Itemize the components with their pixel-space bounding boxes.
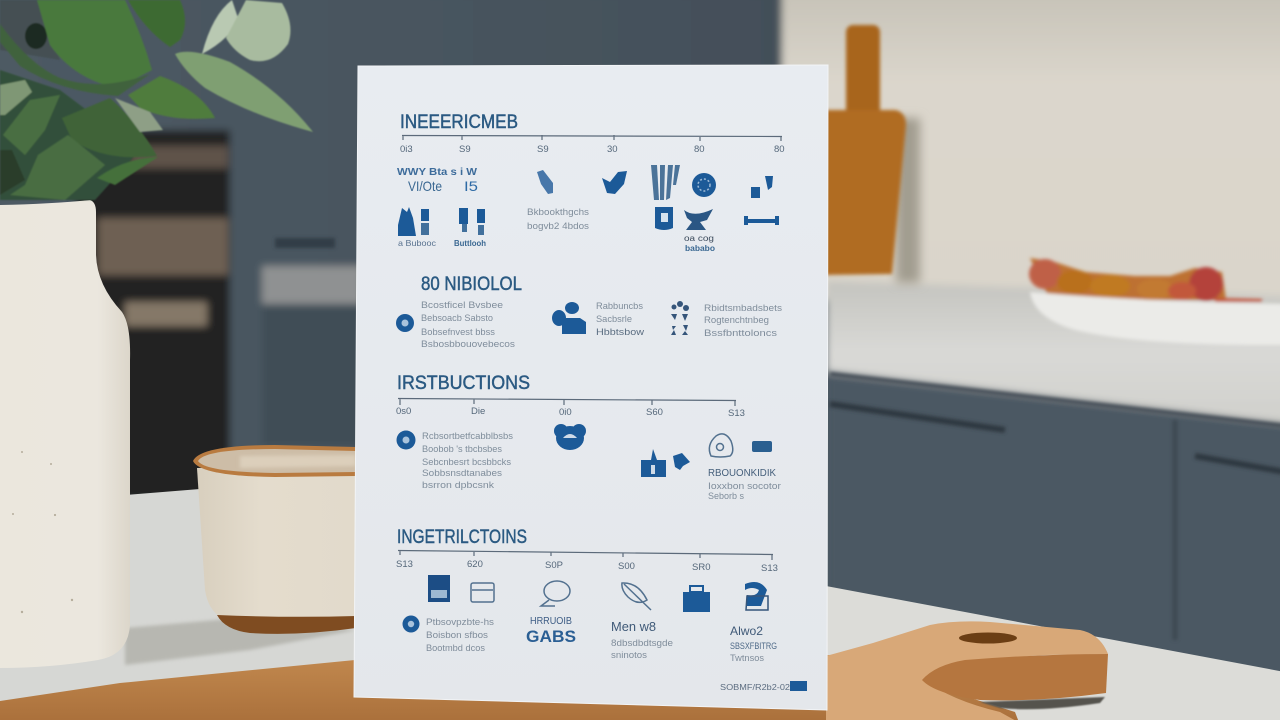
- section 3 timeline: 0s0: [396, 406, 411, 417]
- instruction text: bsrron dpbcsnk: [422, 480, 494, 491]
- instruction text: Sobbsnsdtanabes: [422, 468, 502, 479]
- figure captions: a Bubooc: [398, 238, 437, 248]
- section 3 timeline: 0i0: [559, 407, 572, 418]
- caption: middle: sninotos: [611, 650, 647, 661]
- text column 1: Bebsoacb Sabsto: [421, 313, 493, 324]
- section 1: [397, 112, 785, 253]
- section 4: [396, 527, 807, 692]
- ceramic cup: [193, 445, 356, 634]
- text column 2: Hbbtsbow: [596, 327, 644, 338]
- caption: Ioxxbon socotor: [708, 481, 781, 492]
- section 1 timeline: 0i3: [400, 144, 413, 155]
- section 3 timeline: [396, 398, 745, 419]
- wooden cutting board on the wall: [825, 25, 906, 275]
- caption: bold blue: HRRUOIB: [530, 615, 572, 627]
- section 4 timeline: S13: [396, 559, 413, 570]
- instruction text: Boisbon sfbos: [426, 630, 488, 641]
- caption: middle: Men w8: [611, 619, 656, 634]
- text column 3: [704, 303, 782, 339]
- caption: middle: 8dbsdbdtsgde: [611, 638, 673, 649]
- anvil caption: oa cog: [684, 234, 714, 243]
- section 1 timeline: 30: [607, 144, 618, 155]
- marble table left: [0, 489, 360, 710]
- icon: rounded animal: [554, 424, 586, 450]
- marble table right: [826, 586, 1280, 720]
- section 4 timeline: [396, 550, 778, 574]
- caption: middle: [611, 619, 673, 661]
- instruction text: Bootmbd dcos: [426, 643, 485, 654]
- instruction text: [426, 617, 494, 654]
- icon: cluster: [552, 302, 586, 334]
- ceramic vase: [0, 200, 130, 668]
- text column 2: [596, 301, 644, 338]
- anvil caption: bababo: [685, 244, 715, 253]
- section 1 label: [397, 167, 478, 194]
- instruction text: Boobob 's tbcbsbes: [422, 444, 502, 455]
- text column 1: [421, 300, 515, 350]
- badge icon: [396, 430, 416, 450]
- footer note: SOBMF/R2b2-02: [720, 683, 791, 692]
- icon: figures left: [398, 207, 485, 236]
- text column 3: Rbidtsmbadsbets: [704, 303, 782, 314]
- section 1 label: I5: [464, 178, 478, 194]
- badge icon: [402, 616, 420, 632]
- icon: outlined panel: [471, 583, 494, 602]
- caption: right: [730, 624, 777, 664]
- icon: outlined leaf: [622, 583, 651, 610]
- section 1 label: VI/Ote: [408, 178, 442, 194]
- cabinet door details: [275, 243, 1280, 640]
- icon: outlined brain: [541, 581, 570, 606]
- instruction text: Sebcnbesrt bcsbbcks: [422, 457, 511, 468]
- section 1 heading: INEEERICMEB: [400, 112, 518, 133]
- caption: right: Twtnsos: [730, 653, 764, 664]
- section 4 heading: INGETRILCTOINS: [397, 527, 527, 548]
- text column 2: Sacbsrle: [596, 314, 632, 325]
- section 4 timeline: S00: [618, 561, 635, 572]
- text column 1: Bcostficel Bvsbee: [421, 300, 503, 311]
- text column 2: Rabbuncbs: [596, 301, 643, 312]
- icon: tool: [537, 170, 553, 194]
- wooden board handle: [826, 621, 1108, 720]
- foreground wooden board: [0, 655, 1020, 720]
- section 1 timeline: S9: [537, 144, 549, 155]
- section 4 timeline: SR0: [692, 562, 710, 573]
- section 1 timeline: 80: [694, 144, 705, 155]
- section 1 timeline: 80: [774, 144, 785, 155]
- icon: star: [673, 453, 690, 470]
- text column 1: Bobsefnvest bbss: [421, 327, 495, 338]
- icon: bird: [602, 171, 627, 194]
- plant leaves: [0, 0, 313, 200]
- section 2 heading: 80 NIBIOLOL: [421, 274, 522, 295]
- section 3 timeline: S13: [728, 408, 745, 419]
- wall-board shadow: [896, 118, 920, 283]
- icon: briefcase: [683, 586, 710, 612]
- icon: people group: [671, 301, 689, 335]
- anvil caption: [684, 234, 715, 253]
- caption: [708, 468, 781, 502]
- caption: RBOUONKIDIK: [708, 468, 776, 479]
- text column 3: Rogtenchtnbeg: [704, 315, 769, 326]
- bowl of fruit: [1029, 258, 1280, 345]
- footer note: [720, 681, 807, 692]
- section 3 heading: IRSTBUCTIONS: [397, 373, 530, 394]
- section 1 timeline: S9: [459, 144, 471, 155]
- figure captions: Buttlooh: [454, 238, 486, 248]
- icon: small box: [752, 441, 772, 452]
- section 3 timeline: S60: [646, 407, 663, 418]
- icon: small objects: [751, 176, 773, 198]
- description text: Bkbookthgchs: [527, 207, 589, 218]
- caption: bold blue: [526, 615, 576, 646]
- text column 1: Bsbosbbouovebecos: [421, 339, 515, 350]
- badge icon: [396, 314, 414, 332]
- description text: bogvb2 4bdos: [527, 221, 589, 232]
- section 1 timeline: [400, 135, 785, 155]
- section 1 label: WWY Bta s i W: [397, 167, 478, 178]
- instruction text: Ptbsovpzbte-hs: [426, 617, 494, 628]
- icon: columns: [651, 165, 680, 200]
- icon: blue shield: [655, 207, 673, 230]
- icon: map marker: [745, 582, 768, 610]
- icon: head outline: [709, 434, 733, 457]
- description text: [527, 207, 589, 232]
- section 2: [396, 274, 782, 350]
- icon: bar: [744, 216, 779, 225]
- icon: blue square: [428, 575, 450, 602]
- section 4 timeline: S13: [761, 563, 778, 574]
- icon: anvil: [684, 209, 713, 230]
- instruction text: [422, 431, 513, 491]
- figure captions: [398, 238, 486, 248]
- instruction text: Rcbsortbetfcabblbsbs: [422, 431, 513, 442]
- caption: right: Alwo2: [730, 624, 763, 638]
- text column 3: Bssfbnttoloncs: [704, 328, 777, 339]
- paper card: [354, 65, 828, 710]
- caption: right: SBSXFBITRG: [730, 641, 777, 652]
- section 4 timeline: S0P: [545, 560, 563, 571]
- section 3: [396, 373, 781, 502]
- icon: round badge: [692, 173, 716, 197]
- section 4 timeline: 620: [467, 559, 483, 570]
- section 3 timeline: Die: [471, 406, 485, 417]
- caption: Seborb s: [708, 491, 744, 502]
- caption: bold blue: GABS: [526, 627, 576, 646]
- icon: house: [641, 449, 666, 477]
